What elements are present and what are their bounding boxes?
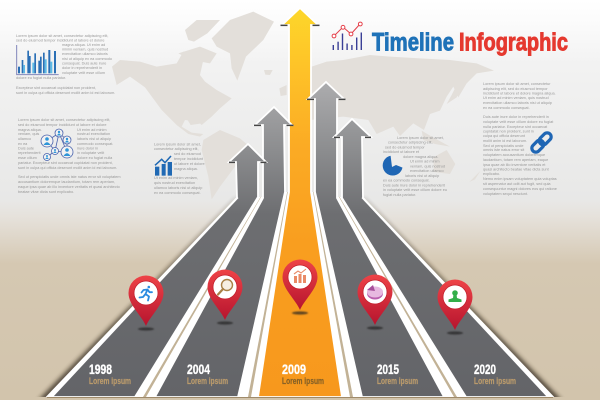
- text block: pie: Lorem ipsum dolor sit amet,: [397, 136, 444, 140]
- text block: top left with chart: Excepteur sint occaecat cupidatat non proident,: [16, 86, 96, 90]
- arrow road 3: orange: [258, 8, 342, 397]
- text block: network: [18, 118, 121, 194]
- text block: network: accusantium doloremque laudantium, totam rem aperiam,: [18, 180, 115, 184]
- text block: growth: ut labore et dolore: [174, 162, 205, 166]
- text block: right: Lorem ipsum dolor sit amet, consectetur: [483, 82, 551, 86]
- label 1998: [89, 361, 131, 386]
- bottom strip: [0, 397, 600, 400]
- text block: pie: sed do eiusmod tempor: [385, 146, 425, 150]
- text block: growth: [154, 143, 205, 195]
- text block: network: sunt in culpa qui officia deserunt mollit anim id est laborum.: [18, 166, 117, 170]
- text block: growth: Lorem ipsum dolor sit amet,: [154, 143, 201, 147]
- text block: right: ex ea commodo consequat.: [483, 106, 530, 110]
- text block: top left with chart: dolor in reprehenderit in: [62, 66, 102, 70]
- text block: right: quasi architecto beatae vitae dicta sunt: [483, 168, 550, 172]
- text block: right: consequuntur magni dolores eos qui ratione: [483, 187, 557, 191]
- text block: right: Duis aute irure dolor in reprehenderit in: [483, 115, 549, 119]
- text block: right: sit aspernatur aut odit aut fugit, sed quia: [483, 182, 551, 186]
- text block: growth: sed do eiusmod: [174, 152, 201, 156]
- text block: pie: Duis aute irure dolor in reprehenderit: [383, 184, 446, 188]
- text block: network: commodo consequat.: [77, 142, 113, 146]
- text block: network: beatae vitae dicta sunt explicabo.: [18, 190, 74, 194]
- text block: pie: consectetur adipiscing elit,: [388, 141, 433, 145]
- text block: top left with chart: consequat. Duis aute irure: [62, 62, 106, 66]
- pin 4: pie: [358, 274, 392, 330]
- pin 2: magnifier: [208, 270, 242, 325]
- text block: right: ipsa quae ab illo inventore veritatis et: [483, 163, 546, 167]
- title: [372, 28, 568, 56]
- text block: pie: dolore magna aliqua.: [403, 155, 438, 159]
- text block: pie: veniam, quis nostrud: [410, 164, 445, 168]
- road dividers and edges: [47, 192, 553, 397]
- text block: growth: consectetur adipiscing elit,: [154, 147, 199, 151]
- label 2015: 2015: [377, 361, 399, 377]
- text block: network: sed do eiusmod tempor incididunt ut labore et dolore: [18, 123, 106, 127]
- label 2020: Lorem ipsum: [474, 376, 516, 386]
- text block: right: culpa qui officia deserunt: [483, 134, 526, 138]
- text block: right: nulla pariatur. Excepteur sint occaecat: [483, 125, 548, 129]
- text block: pie: exercitation ullamco: [410, 169, 444, 173]
- text block: top left with chart: Lorem ipsum dolor sit amet, consectetur adipiscing elit,: [16, 34, 108, 38]
- text block: right: Sed ut perspiciatis unde: [483, 144, 524, 148]
- text block: right: Ut enim ad minim veniam, quis nostrud: [483, 96, 549, 100]
- label 2009: [282, 361, 324, 386]
- text block: network: irure dolor in: [77, 146, 98, 150]
- text block: network: Lorem ipsum dolor sit amet, consectetur adipiscing elit,: [18, 118, 110, 122]
- text block: top left with chart: nisi ut aliquip ex ea commodo: [62, 57, 112, 61]
- text block: right: incididunt ut labore et dolore magna aliqua.: [483, 92, 556, 96]
- text block: network: Ut enim ad minim: [77, 128, 107, 132]
- label 2004: Lorem ipsum: [187, 376, 228, 386]
- text block: pie: ex ea commodo consequat.: [383, 179, 430, 183]
- text block: network: dolore eu fugiat nulla: [77, 156, 113, 160]
- text block: right: adipiscing elit, sed do eiusmod tempor: [483, 87, 548, 91]
- text block: network: reprehenderit: [18, 151, 42, 155]
- icon: bar chart: [17, 45, 59, 75]
- label 2004: 2004: [187, 361, 210, 377]
- arrow road 5: [334, 119, 553, 397]
- text block: right: laudantium, totam rem aperiam, eaque: [483, 158, 548, 162]
- text block: top left with chart: sed do eiusmod tempor incididunt ut labore et dolore: [16, 38, 104, 42]
- title: Infographic: [459, 28, 568, 56]
- text block: right: exercitation ullamco laboris nisi ut aliquip: [483, 101, 552, 105]
- text block: network: ex ea: [18, 142, 28, 146]
- text block: network: nostrud exercitation: [77, 132, 110, 136]
- icon: pie chart: [383, 155, 404, 176]
- label 2020: [474, 361, 516, 386]
- text block: right: omnis iste natus error sit: [483, 148, 525, 152]
- text block: right: mollit anim id est laborum.: [483, 139, 527, 143]
- icon: growth bars: [155, 156, 172, 176]
- text block: network: veniam, quis: [18, 132, 39, 136]
- label 2020: 2020: [474, 361, 496, 377]
- label 1998: 1998: [89, 361, 112, 377]
- text block: network: esse cillum: [18, 156, 37, 160]
- world map: [112, 12, 494, 199]
- label 2015: [377, 361, 418, 386]
- icon: people network: [41, 129, 73, 160]
- text block: right: voluptatem accusantium doloremque: [483, 153, 545, 157]
- label 2015: Lorem ipsum: [377, 376, 418, 386]
- text block: pie: [383, 136, 447, 197]
- arrow road 2: [155, 107, 294, 397]
- text block: right: [483, 82, 557, 196]
- text block: network: pariatur. Excepteur sint occaecat cupidatat non proident,: [18, 161, 113, 165]
- text block: growth: quis nostrud exercitation: [154, 181, 195, 185]
- label 1998: Lorem ipsum: [89, 376, 131, 386]
- text block: network: ullamco: [18, 137, 31, 141]
- text block: top left with chart: dolore eu fugiat nulla pariatur.: [16, 76, 66, 80]
- text block: right: Nemo enim ipsam voluptatem quia voluptas: [483, 177, 557, 181]
- pin 1: runner: [128, 276, 164, 331]
- label 2004: [187, 361, 228, 386]
- text block: right: explicabo.: [483, 172, 500, 176]
- text block: top left with chart: voluptate velit esse cillum: [62, 71, 105, 75]
- text block: growth: ullamco laboris nisi ut aliquip: [154, 186, 202, 190]
- text block: top left with chart: exercitation ullamco laboris: [62, 52, 108, 56]
- icon: chain link: [530, 131, 553, 154]
- text block: growth: ex ea commodo consequat.: [154, 191, 201, 195]
- text block: pie: incididunt ut labore et: [383, 150, 420, 154]
- text block: right: cupidatat non proident, sunt in: [483, 130, 534, 134]
- text block: pie: in voluptate velit esse cillum dolore eu: [383, 188, 447, 192]
- text block: growth: Ut enim ad minim veniam,: [154, 176, 198, 180]
- text block: network: laboris nisi ut aliquip: [77, 137, 111, 141]
- pin 3: chart: [282, 260, 318, 315]
- text block: top left with chart: sunt in culpa qui officia deserunt mollit anim id est laborum.: [16, 91, 115, 95]
- text block: network: Sed ut perspiciatis unde omnis iste natus error sit voluptatem: [18, 175, 121, 179]
- text block: right: voluptate velit esse cillum dolore eu fugiat: [483, 120, 554, 124]
- text block: network: magna aliqua.: [18, 128, 42, 132]
- road outer shadows: [38, 198, 562, 400]
- title: Timeline: [372, 28, 454, 56]
- text block: top left with chart: minim veniam, quis nostrud: [62, 48, 108, 52]
- text block: pie: laboris nisi ut aliquip: [405, 174, 439, 178]
- arrow road 1: [47, 144, 266, 397]
- text block: network: eaque ipsa quae ab illo inventore veritatis et quasi architecto: [18, 185, 120, 189]
- text block: network: Duis aute: [18, 146, 34, 150]
- pin 5: person: [438, 280, 472, 335]
- text block: network: in voluptate velit: [77, 151, 105, 155]
- text block: right: voluptatem sequi nesciunt.: [483, 192, 528, 196]
- title icon: line and bars: [332, 22, 362, 50]
- text block: top left with chart: [16, 34, 115, 95]
- label 2009: 2009: [282, 361, 306, 377]
- text block: top left with chart: magna aliqua. Ut enim ad: [62, 43, 105, 47]
- text block: growth: magna aliqua.: [174, 167, 198, 171]
- arrow road 4: [307, 82, 444, 397]
- label 2009: Lorem ipsum: [282, 376, 324, 386]
- text block: pie: Ut enim ad minim: [410, 160, 440, 164]
- text block: pie: fugiat nulla pariatur.: [383, 193, 416, 197]
- text block: growth: tempor incididunt: [174, 157, 204, 161]
